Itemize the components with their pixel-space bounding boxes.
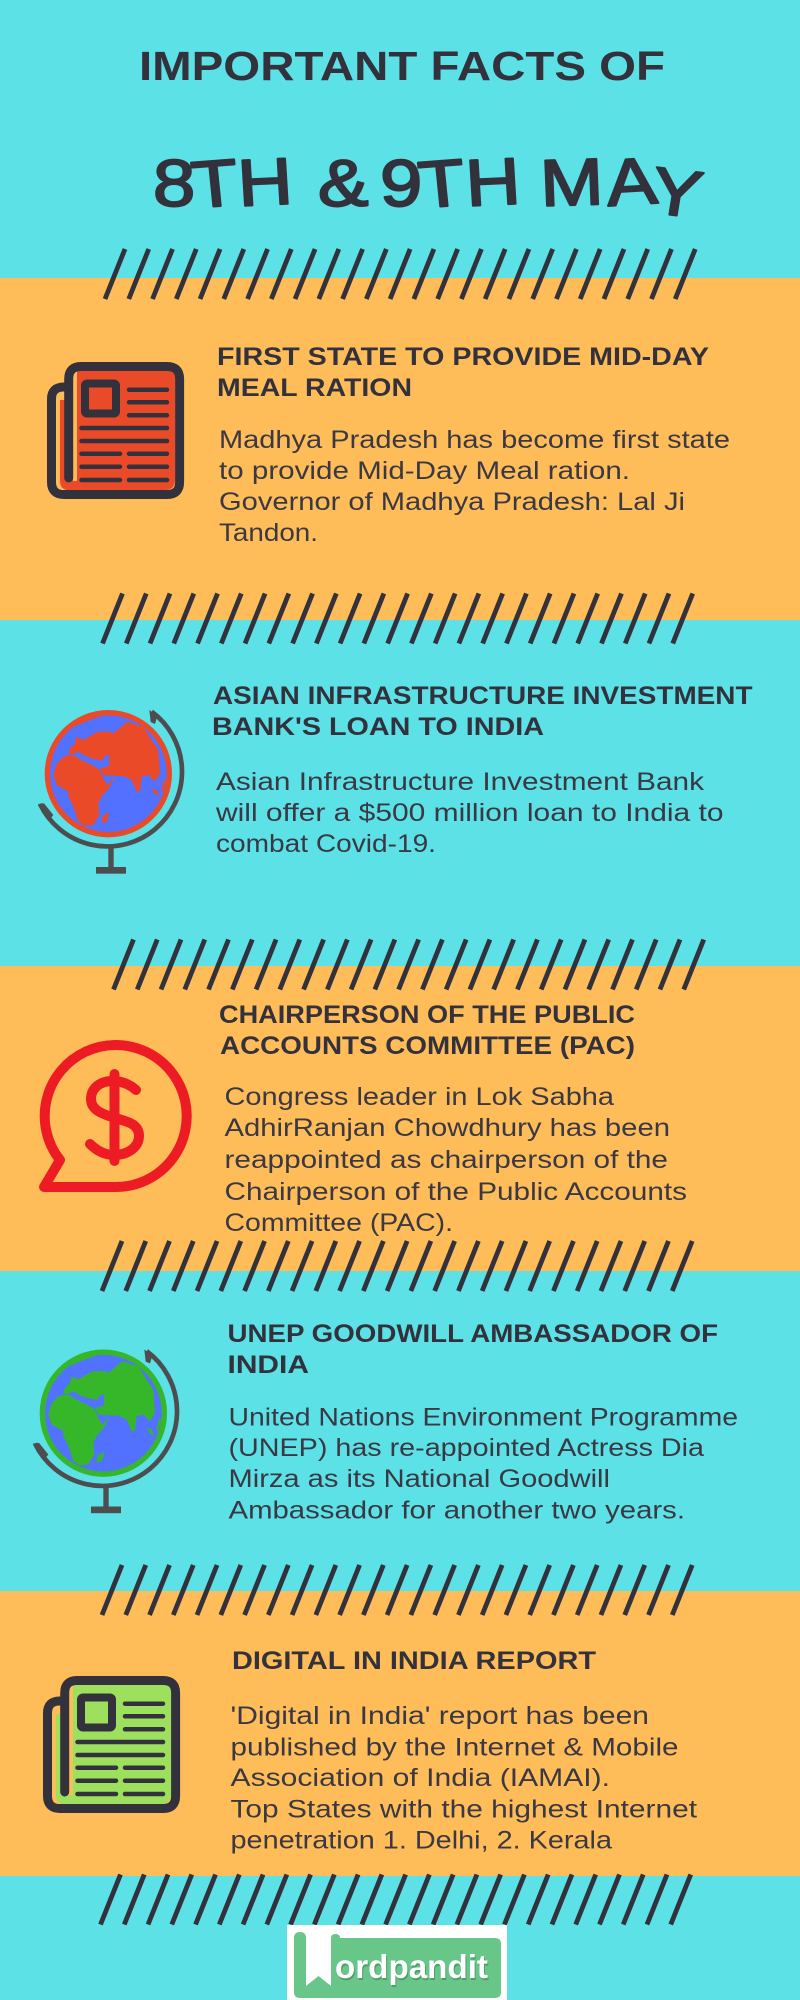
icon: globe red: [38, 710, 182, 874]
heading: [217, 343, 709, 402]
logo: wordpandit: ordpandit: [335, 1948, 488, 1985]
icon: globe green: [33, 1349, 177, 1513]
text block: [215, 768, 724, 858]
text block: Committee (PAC).: [224, 1209, 453, 1237]
text block: [228, 1404, 738, 1524]
logo: wordpandit: ordpandit: [336, 1950, 489, 1987]
heading: FIRST STATE TO PROVIDE MID-DAY: [217, 343, 709, 371]
heading: DIGITAL IN INDIA REPORT: [232, 1647, 596, 1675]
text block: will offer a $500 million loan to India to: [215, 799, 724, 827]
text block: [219, 426, 730, 547]
text block: penetration 1. Delhi, 2. Kerala: [230, 1826, 612, 1854]
heading: ASIAN INFRASTRUCTURE INVESTMENT: [213, 682, 752, 710]
heading: [212, 682, 752, 741]
text block: to provide Mid-Day Meal ration.: [219, 457, 630, 485]
panel: first state mid-day meal: [0, 278, 800, 620]
text block: Top States with the highest Internet: [230, 1796, 697, 1824]
text block: Tandon.: [219, 519, 318, 547]
heading: MEAL RATION: [217, 374, 412, 402]
text block: combat Covid-19.: [216, 830, 436, 858]
text block: Governor of Madhya Pradesh: Lal Ji: [219, 488, 685, 516]
text block: 'Digital in India' report has been: [230, 1702, 649, 1730]
text block: Madhya Pradesh has become first state: [219, 426, 730, 454]
text block: [230, 1702, 697, 1854]
text block: Congress leader in Lok Sabha: [224, 1083, 614, 1111]
heading: ACCOUNTS COMMITTEE (PAC): [220, 1032, 635, 1060]
title: date: 8TH & 9TH MAY: [153, 145, 708, 233]
heading: UNEP GOODWILL AMBASSADOR OF: [228, 1320, 718, 1348]
heading: [228, 1320, 718, 1379]
text block: reappointed as chairperson of the: [224, 1146, 668, 1174]
text block: Mirza as its National Goodwill: [228, 1465, 610, 1493]
text block: Chairperson of the Public Accounts: [224, 1178, 687, 1206]
heading: INDIA: [228, 1351, 309, 1379]
panel: header: [0, 0, 800, 278]
text block: (UNEP) has re-appointed Actress Dia: [228, 1434, 704, 1462]
text block: [224, 1083, 687, 1237]
text block: AdhirRanjan Chowdhury has been: [224, 1114, 670, 1142]
panel: digital in india report: [0, 1591, 800, 1876]
title: important facts of: IMPORTANT FACTS OF: [139, 43, 665, 89]
heading: BANK'S LOAN TO INDIA: [212, 713, 544, 741]
text block: Ambassador for another two years.: [228, 1496, 685, 1524]
panel: unep goodwill ambassador: [0, 1271, 800, 1591]
panel: footer: [0, 1876, 800, 2000]
panel: asian infrastructure investment bank: [0, 620, 800, 966]
text block: Association of India (IAMAI).: [230, 1764, 610, 1792]
panel: public accounts committee: [0, 966, 800, 1271]
logo: wordpandit: [287, 1925, 507, 2000]
text block: published by the Internet & Mobile: [230, 1734, 678, 1762]
icon: newspaper red: [52, 366, 180, 494]
heading: CHAIRPERSON OF THE PUBLIC: [219, 1001, 635, 1029]
icon: newspaper green: [48, 1680, 176, 1808]
text block: United Nations Environment Programme: [228, 1404, 738, 1432]
icon: dollar speech bubble: [44, 1045, 187, 1187]
heading: [219, 1001, 635, 1060]
text block: Asian Infrastructure Investment Bank: [216, 768, 705, 796]
